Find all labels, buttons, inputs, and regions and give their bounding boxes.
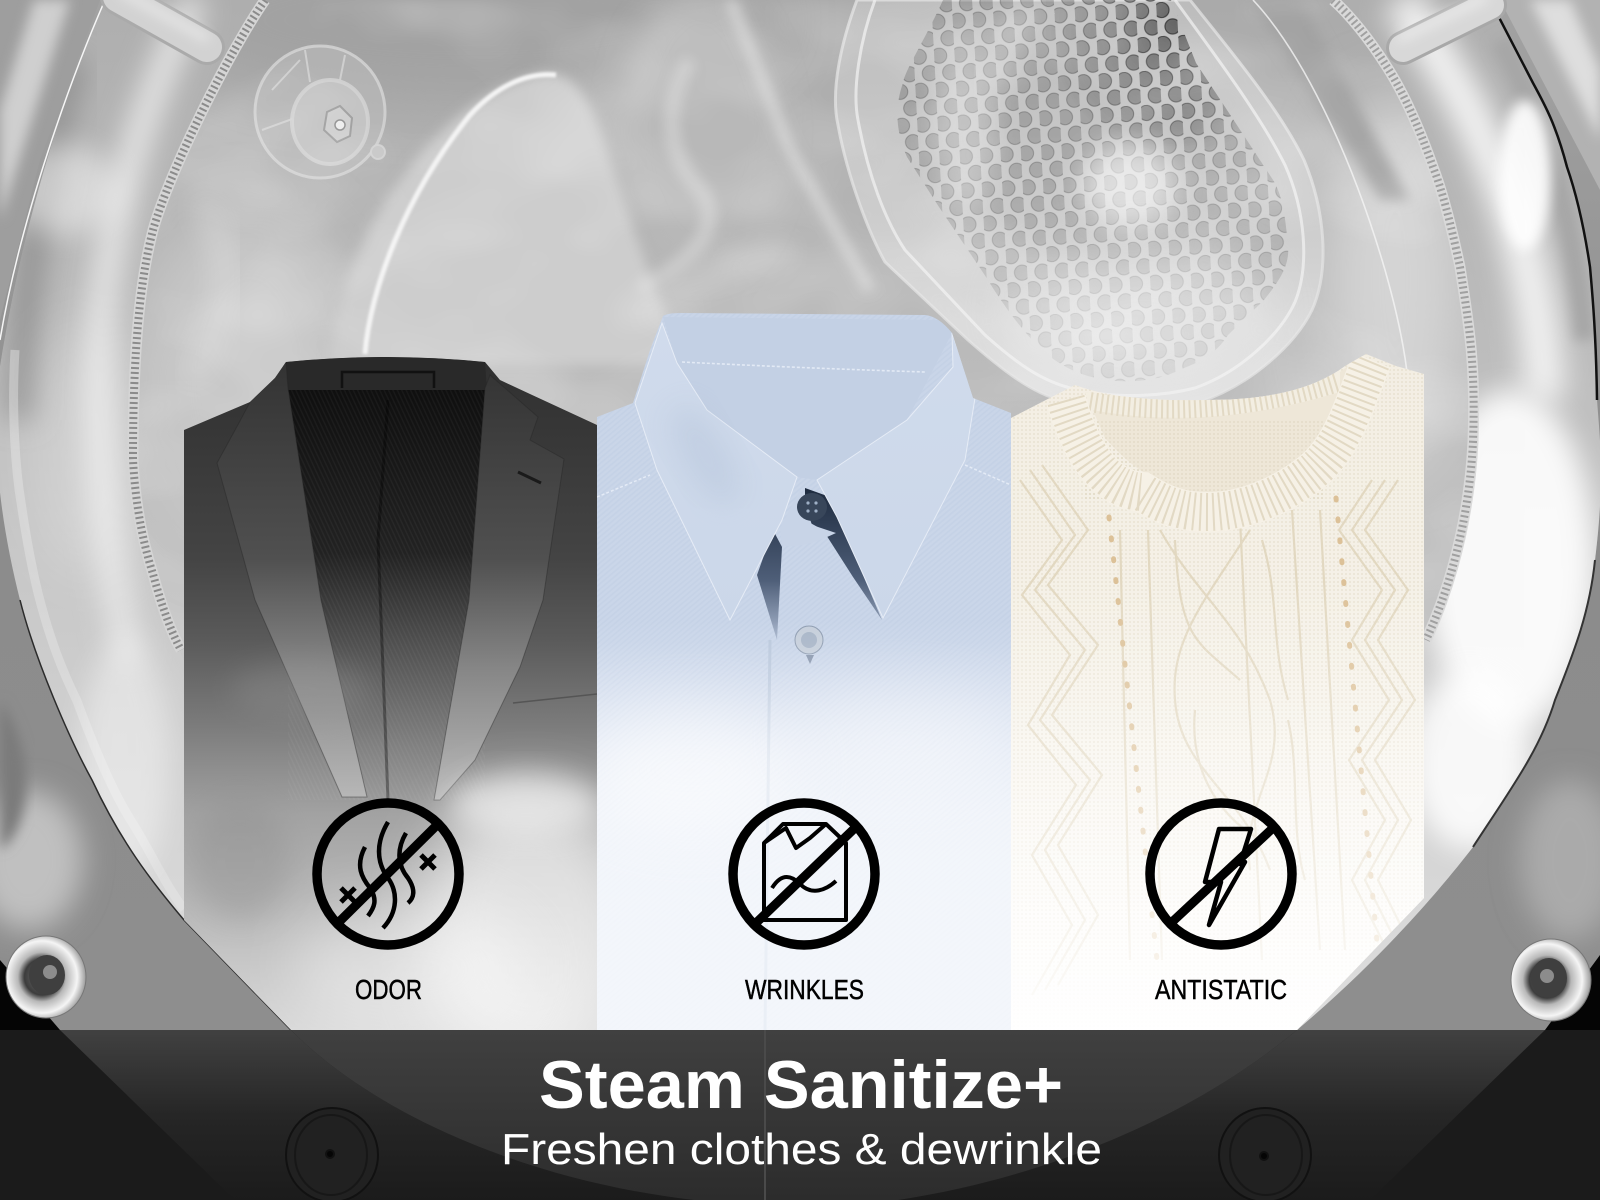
jacket lining — [288, 390, 485, 686]
panel: jacket — [184, 357, 597, 1030]
top button — [797, 493, 827, 521]
jacket collar band — [286, 357, 487, 390]
metal band highlights — [20, 0, 1585, 660]
buttonhole — [518, 472, 541, 483]
shirt steam — [580, 620, 1011, 1030]
label: antistatic: ANTISTATIC — [1155, 974, 1287, 1005]
panel: shirt — [580, 313, 1011, 1030]
diagonal light strut — [730, 0, 870, 290]
glitter drum seal ring — [133, 0, 1474, 650]
inner collar stitching — [682, 362, 925, 372]
steam noise layer — [138, 0, 1468, 462]
dark placket right — [805, 488, 882, 620]
steam puffs on band — [10, 100, 1595, 880]
thin inner drum line — [1253, 0, 1407, 372]
placket line — [765, 640, 770, 1030]
left foot — [286, 1108, 378, 1200]
translucent gasket band — [9, 350, 88, 736]
drum back wall — [142, 0, 1468, 630]
right foot — [1219, 1108, 1311, 1200]
heading: Steam Sanitize+ — [539, 1047, 1063, 1123]
left grommet — [6, 936, 86, 1018]
icon: no static — [1150, 803, 1292, 945]
panel: bottom banner — [0, 1030, 1600, 1200]
sweater fade — [1011, 580, 1424, 1030]
subheading: Freshen clothes & dewrinkle — [501, 1125, 1102, 1174]
panel: sweater — [1011, 350, 1424, 1030]
yoke seams — [597, 465, 1011, 497]
jacket steam — [196, 660, 597, 1030]
jacket center lining seam — [378, 400, 388, 800]
left drum lifter — [118, 0, 207, 47]
dark placket left — [757, 530, 782, 640]
steam wisps — [206, 60, 779, 304]
drum bolt mount — [255, 46, 385, 178]
collar shadows — [658, 396, 752, 514]
label: wrinkles: WRINKLES — [745, 974, 864, 1005]
lower button — [795, 626, 823, 664]
left collar leaf — [635, 323, 797, 620]
jacket side seam — [513, 694, 597, 703]
eyelet columns — [1109, 498, 1377, 960]
right collar leaf — [817, 333, 975, 618]
inner collar back — [939, 320, 940, 321]
steam over filter — [935, 0, 1270, 370]
paddle shape — [330, 73, 690, 365]
perforated holes — [898, 0, 1288, 382]
sweater zigzag cables — [1020, 465, 1415, 995]
sweater back neck — [1085, 366, 1348, 496]
lint filter plate — [835, 0, 1323, 409]
right lapel — [434, 375, 564, 800]
collar stand — [780, 490, 836, 546]
icon: no wrinkles — [733, 803, 875, 945]
right drum lifter — [1400, 0, 1490, 48]
icon: no odor — [317, 803, 459, 945]
label: odor: ODOR — [355, 974, 422, 1005]
right grommet — [1511, 939, 1591, 1021]
left lapel — [217, 362, 367, 797]
sweater neck ribbing — [1066, 360, 1372, 512]
